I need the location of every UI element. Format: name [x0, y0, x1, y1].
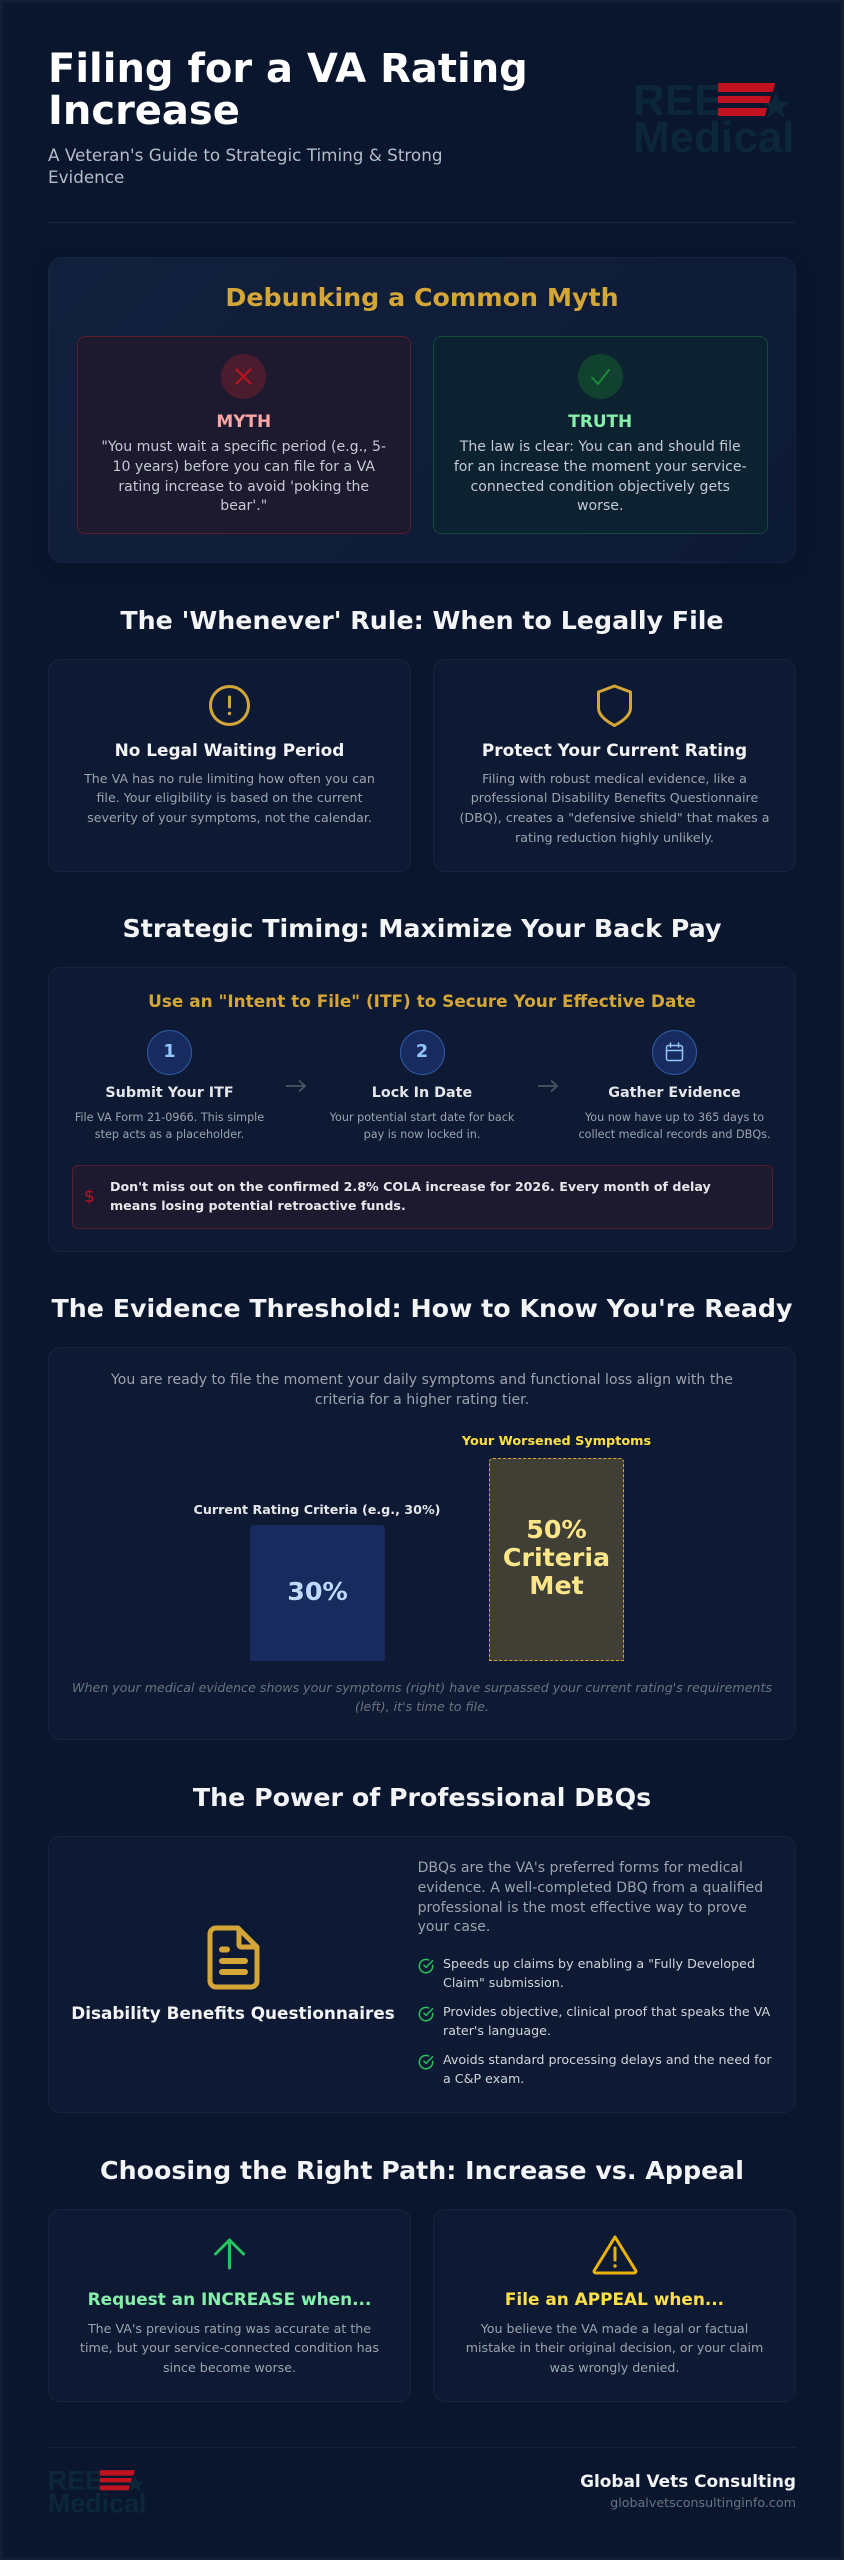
truth text: The law is clear: You can and should file — [460, 439, 741, 455]
footer brand: Global Vets Consulting — [580, 2471, 796, 2491]
subtitle: A Veteran's Guide to Strategic Timing & Strong — [48, 145, 442, 165]
step 3 badge — [652, 1030, 697, 1075]
callout text: Don't miss out on the confirmed 2.8% COLA increase for 2026. Every month of delay — [110, 1179, 711, 1194]
DBQ text: professional is the most effective way to prove — [418, 1900, 747, 1916]
intro text — [111, 1372, 733, 1408]
check icon 1 — [418, 1958, 434, 1974]
list item 3: a C&P exam. — [443, 2071, 524, 2086]
list item 1: Claim" submission. — [443, 1975, 564, 1990]
intro text: You are ready to file the moment your daily symptoms and functional loss align with the — [111, 1372, 733, 1388]
bar value: 50% — [503, 1515, 610, 1600]
title — [48, 46, 528, 134]
step 2 title: Lock In Date — [372, 1085, 472, 1101]
step 2 text — [330, 1111, 514, 1141]
DBQ text: evidence. A well-completed DBQ from a qualified — [418, 1880, 763, 1896]
bar value: 30%: 30% — [287, 1577, 348, 1606]
appeal text — [466, 2321, 763, 2375]
callout: COLA — [72, 1165, 773, 1229]
step 1 badge — [147, 1030, 192, 1075]
panel: increase — [48, 2209, 411, 2402]
panel: evidence threshold — [48, 1347, 796, 1740]
panel: no legal waiting period — [48, 659, 411, 872]
panel: protect your current rating — [433, 659, 796, 872]
bar label: worsened: Your Worsened Symptoms — [462, 1434, 651, 1449]
panel: truth — [433, 336, 768, 534]
title: Filing for a VA Rating — [48, 46, 528, 92]
panel: debunking a common myth — [48, 257, 796, 563]
increase text: The VA's previous rating was accurate at the — [88, 2321, 371, 2336]
check icon 2 — [418, 2006, 434, 2022]
subheading: ITF: Use an "Intent to File" (ITF) to Secure Your Effective Date — [148, 991, 696, 1011]
caption: When your medical evidence shows your symptoms (right) have surpassed your current rating's requirements — [72, 1680, 772, 1695]
bar value: 50%: Criteria — [503, 1543, 610, 1572]
heading: DBQs: The Power of Professional DBQs — [193, 1783, 651, 1812]
heading: evidence threshold: The Evidence Threshold: How to Know You're Ready — [52, 1294, 792, 1323]
icon: dollar: $ — [84, 1187, 95, 1207]
heading: strategic timing: Strategic Timing: Maximize Your Back Pay — [123, 914, 721, 943]
card text: (DBQ), creates a "defensive shield" that makes a — [460, 810, 769, 825]
callout text: means losing potential retroactive funds. — [110, 1198, 406, 1213]
myth label: MYTH — [216, 411, 271, 431]
icon: x in circle — [221, 354, 266, 399]
step 1 text — [75, 1111, 264, 1141]
DBQ label: Disability Benefits Questionnaires — [71, 2003, 395, 2023]
truth text: worse. — [577, 498, 623, 514]
myth text: bear'." — [220, 498, 267, 514]
card text: The VA has no rule limiting how often you can — [84, 771, 375, 786]
icon: warning triangle — [592, 2235, 638, 2274]
step 3 text: You now have up to 365 days to — [585, 1111, 764, 1124]
myth text — [101, 439, 386, 514]
myth text: rating increase to avoid 'poking the — [118, 479, 369, 495]
check icon 3 — [418, 2054, 434, 2070]
panel: intent to file — [48, 967, 796, 1252]
step 1 text: File VA Form 21-0966. This simple — [75, 1111, 264, 1124]
appeal text: was wrongly denied. — [550, 2360, 679, 2375]
intro text: criteria for a higher rating tier. — [315, 1392, 529, 1408]
step 1 title: Submit Your ITF — [105, 1085, 234, 1101]
increase text: since become worse. — [163, 2360, 296, 2375]
increase text: time, but your service-connected condition has — [80, 2340, 379, 2355]
arrow — [538, 1080, 558, 1092]
list item 2: Provides objective, clinical proof that speaks the VA — [443, 2004, 770, 2019]
bar label: current: Current Rating Criteria (e.g., 30%) — [194, 1502, 440, 1517]
card title: Protect Your Current Rating — [482, 740, 747, 760]
arrow — [286, 1080, 306, 1092]
step 1 badge: 1 — [163, 1042, 176, 1062]
step 3 text: collect medical records and DBQs. — [578, 1128, 771, 1141]
increase text — [80, 2321, 379, 2375]
card text: Filing with robust medical evidence, like a — [482, 771, 747, 786]
bar value: 50%: Met — [529, 1571, 584, 1600]
appeal text: You believe the VA made a legal or factual — [481, 2321, 748, 2336]
card text: rating reduction highly unlikely. — [515, 830, 714, 845]
title: Increase — [48, 88, 240, 134]
list item 3 — [443, 2052, 772, 2086]
list item 2: rater's language. — [443, 2023, 551, 2038]
heading: whenever rule: The 'Whenever' Rule: When to Legally File — [120, 606, 724, 635]
DBQ text: DBQs are the VA's preferred forms for medical — [418, 1860, 743, 1876]
increase title: Request an INCREASE when... — [88, 2289, 371, 2309]
myth text: "You must wait a specific period (e.g., 5- — [101, 439, 386, 455]
appeal text: mistake in their original decision, or your claim — [466, 2340, 763, 2355]
list item 2 — [443, 2004, 770, 2038]
card text: professional Disability Benefits Questionnaire — [471, 790, 758, 805]
heading: right path: Choosing the Right Path: Increase vs. Appeal — [100, 2156, 744, 2185]
icon: up arrow — [214, 2238, 246, 2270]
heading: debunking: Debunking a Common Myth — [225, 283, 619, 312]
panel: DBQs — [48, 1836, 796, 2113]
step 3 title: Gather Evidence — [608, 1085, 741, 1101]
bar: worsened symptoms — [489, 1458, 624, 1661]
card text — [84, 771, 375, 825]
icon: shield — [597, 684, 632, 727]
icon: document — [208, 1926, 260, 1990]
subtitle: Evidence — [48, 167, 124, 187]
callout text — [110, 1179, 711, 1213]
caption — [72, 1680, 772, 1714]
step 1 text: step acts as a placeholder. — [95, 1128, 244, 1141]
caption: (left), it's time to file. — [355, 1699, 489, 1714]
list item 3: Avoids standard processing delays and the need for — [443, 2052, 772, 2067]
step 2 text: pay is now locked in. — [364, 1128, 480, 1141]
step 2 text: Your potential start date for back — [330, 1111, 514, 1124]
card text — [460, 771, 769, 845]
card text: severity of your symptoms, not the calendar. — [87, 810, 372, 825]
icon: check in circle — [578, 354, 623, 399]
logo: footer — [48, 2467, 147, 2515]
truth label: TRUTH — [568, 411, 632, 431]
panel: appeal — [433, 2209, 796, 2402]
list item 1: Speeds up claims by enabling a "Fully Developed — [443, 1956, 755, 1971]
card text: file. Your eligibility is based on the current — [96, 790, 363, 805]
list item 1 — [443, 1956, 755, 1990]
truth text — [454, 439, 747, 514]
subtitle — [48, 145, 442, 187]
appeal title: File an APPEAL when... — [505, 2289, 724, 2309]
icon: alert circle — [209, 685, 250, 726]
step 3 text — [578, 1111, 771, 1141]
bar value: 50%: 50% — [526, 1515, 587, 1544]
DBQ text — [418, 1860, 763, 1935]
truth text: for an increase the moment your service- — [454, 459, 747, 475]
panel: myth — [76, 336, 411, 534]
card title: No Legal Waiting Period — [115, 740, 344, 760]
myth text: 10 years) before you can file for a VA — [112, 459, 375, 475]
DBQ text: your case. — [418, 1919, 490, 1935]
bar: current rating — [250, 1525, 385, 1661]
footer url: globalvetsconsultinginfo.com — [610, 2494, 796, 2510]
step 2 badge — [400, 1030, 444, 1075]
truth text: connected condition objectively gets — [470, 479, 730, 495]
logo: header — [633, 78, 794, 158]
step 2 badge: 2 — [416, 1042, 428, 1062]
